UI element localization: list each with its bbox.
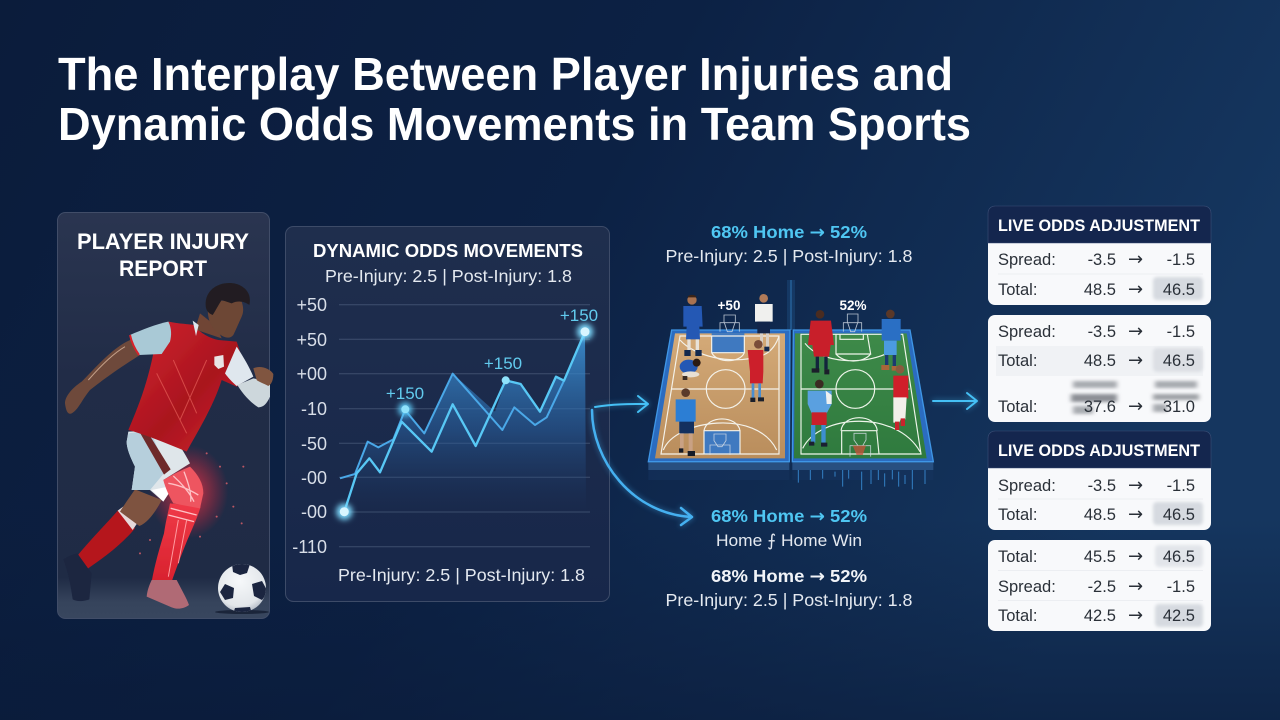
heading: player injury report: PLAYER INJURY — [77, 229, 249, 254]
illustration: split court — [648, 280, 933, 490]
card: live odds values 4: Spread: — [998, 578, 1056, 596]
player: injured crouching — [680, 359, 701, 380]
text block: bottom win probability: 68% Home → 52% — [711, 566, 867, 587]
text block: top win probability: 68% Home → 52% — [711, 222, 867, 243]
line chart: odds movement — [292, 295, 598, 557]
court: basketball — [648, 330, 790, 480]
title — [58, 48, 971, 150]
y axis labels: -110 — [292, 537, 327, 557]
card: live odds adjustment 3: 48.5 — [1084, 506, 1116, 524]
card: live odds values 4: → — [1128, 546, 1143, 567]
text block: top win probability — [666, 222, 912, 266]
heading: player injury report: REPORT — [119, 256, 208, 281]
y axis labels: -00 — [301, 468, 327, 488]
card: live odds values 2: Total: — [998, 352, 1037, 370]
card: live odds adjustment 1: 48.5 — [1084, 281, 1116, 299]
card: live odds values 2: -1.5 — [1167, 323, 1195, 341]
card: live odds values 2: 37.6 — [1084, 398, 1116, 416]
card: live odds values 2: Spread: — [998, 323, 1056, 341]
player: red pitch — [808, 310, 834, 374]
card: live odds adjustment 1: Total: — [998, 281, 1037, 299]
card: live odds values 2: 31.0 — [1163, 398, 1195, 416]
card: live odds values 2: → — [1128, 396, 1143, 417]
front leg — [152, 503, 201, 582]
head — [195, 313, 222, 338]
card: live odds values 4: Total: — [998, 607, 1037, 625]
heading: dynamic odds movements: DYNAMIC ODDS MOVEMENTS — [313, 241, 583, 261]
card: live odds adjustment 3: Spread: — [998, 477, 1056, 495]
back leg — [77, 510, 135, 571]
card: live odds values 4: 46.5 — [1163, 548, 1195, 566]
data labels — [386, 306, 598, 403]
card: live odds values 2: -3.5 — [1088, 323, 1116, 341]
data labels: +150 — [386, 384, 424, 403]
card: live odds values 4: → — [1128, 576, 1143, 597]
card: live odds adjustment 3: -3.5 — [1088, 477, 1116, 495]
card: live odds adjustment 3: 46.5 — [1163, 506, 1195, 524]
card header: LIVE ODDS ADJUSTMENT — [998, 441, 1201, 460]
card: live odds values 4: 42.5 — [1084, 607, 1116, 625]
player: blue standing — [683, 295, 703, 356]
card: live odds adjustment 1: 46.5 — [1163, 281, 1195, 299]
card header — [988, 431, 1211, 468]
title: The Interplay Between Player Injuries and — [58, 48, 953, 100]
title: Dynamic Odds Movements in Team Sports — [58, 98, 971, 150]
court label: +50: +50 — [718, 298, 740, 313]
card: live odds values 4 — [988, 540, 1211, 631]
card: live odds values 2: → — [1128, 350, 1143, 371]
card: live odds values 2: 48.5 — [1084, 352, 1116, 370]
player: blue and red pitch — [808, 380, 832, 447]
card: live odds values 4: -2.5 — [1088, 578, 1116, 596]
player: blue back view — [676, 388, 696, 456]
card: live odds adjustment 1: Spread: — [998, 251, 1056, 269]
card: live odds values 4: 42.5 — [1163, 607, 1195, 625]
card: live odds adjustment 3: → — [1128, 475, 1143, 496]
footer: pre and post injury odds: Pre-Injury: 2.5 | Post-Injury: 1.8 — [338, 565, 585, 585]
text block: bottom win probability: Home ⨍ Home Win — [716, 532, 862, 550]
card: live odds adjustment 1 — [988, 206, 1211, 305]
card header: LIVE ODDS ADJUSTMENT — [998, 216, 1201, 235]
player: red basketball — [748, 340, 764, 402]
court label: 52%: 52% — [839, 298, 867, 313]
card: live odds adjustment 1: → — [1128, 279, 1143, 300]
arrow: chart to win probability — [592, 410, 692, 525]
text block: bottom win probability: 68% Home → 52% — [711, 506, 867, 527]
arrow: chart to court — [595, 396, 648, 412]
data point markers — [336, 324, 593, 520]
card: live odds values 4: 45.5 — [1084, 548, 1116, 566]
panel: player injury report — [58, 212, 273, 618]
data labels: +150 — [560, 306, 598, 325]
card: live odds adjustment 3: Total: — [998, 506, 1037, 524]
heading: player injury report — [77, 229, 249, 281]
card: live odds values 2: 46.5 — [1163, 352, 1195, 370]
card: live odds adjustment 1: -1.5 — [1167, 251, 1195, 269]
y axis labels — [292, 295, 327, 557]
left arm — [65, 339, 140, 414]
panel: dynamic odds movements — [286, 226, 610, 602]
y axis labels: -00 — [301, 502, 327, 522]
card header — [988, 206, 1211, 243]
court: football pitch — [792, 330, 933, 490]
subheading: pre and post injury odds: Pre-Injury: 2.5 | Post-Injury: 1.8 — [325, 266, 572, 286]
card: live odds values 2: Total: — [998, 398, 1037, 416]
illustration: injured footballer — [63, 283, 273, 609]
y axis labels: -10 — [301, 399, 327, 419]
player: red and white pitch — [893, 365, 908, 430]
icon: football — [215, 564, 269, 614]
card: live odds adjustment 1: → — [1128, 249, 1143, 270]
card: live odds values 4: Total: — [998, 548, 1037, 566]
y axis labels: +50 — [296, 295, 327, 315]
arrow: court to live odds — [933, 393, 977, 409]
y axis labels: +50 — [296, 330, 327, 350]
jersey — [128, 322, 248, 452]
card: live odds adjustment 1: -3.5 — [1088, 251, 1116, 269]
y axis labels: +00 — [296, 364, 327, 384]
card: live odds adjustment 3: → — [1128, 504, 1143, 525]
data labels: +150 — [484, 354, 522, 373]
card: live odds values 2 — [988, 315, 1211, 422]
shorts — [127, 430, 190, 502]
blurred figures — [1071, 381, 1199, 414]
card: live odds values 4: → — [1128, 605, 1143, 626]
text block: bottom win probability: Pre-Injury: 2.5 | Post-Injury: 1.8 — [666, 590, 912, 610]
card: live odds adjustment 3 — [988, 431, 1211, 530]
card: live odds adjustment 3: -1.5 — [1167, 477, 1195, 495]
player: referee — [755, 294, 773, 351]
text block: bottom win probability — [666, 506, 912, 610]
player: blue pitch — [881, 310, 901, 371]
y axis labels: -50 — [301, 434, 327, 454]
card: live odds values 2: → — [1128, 321, 1143, 342]
card: live odds values 4: -1.5 — [1167, 578, 1195, 596]
hoops — [710, 314, 871, 457]
text block: top win probability: Pre-Injury: 2.5 | Post-Injury: 1.8 — [666, 246, 912, 266]
